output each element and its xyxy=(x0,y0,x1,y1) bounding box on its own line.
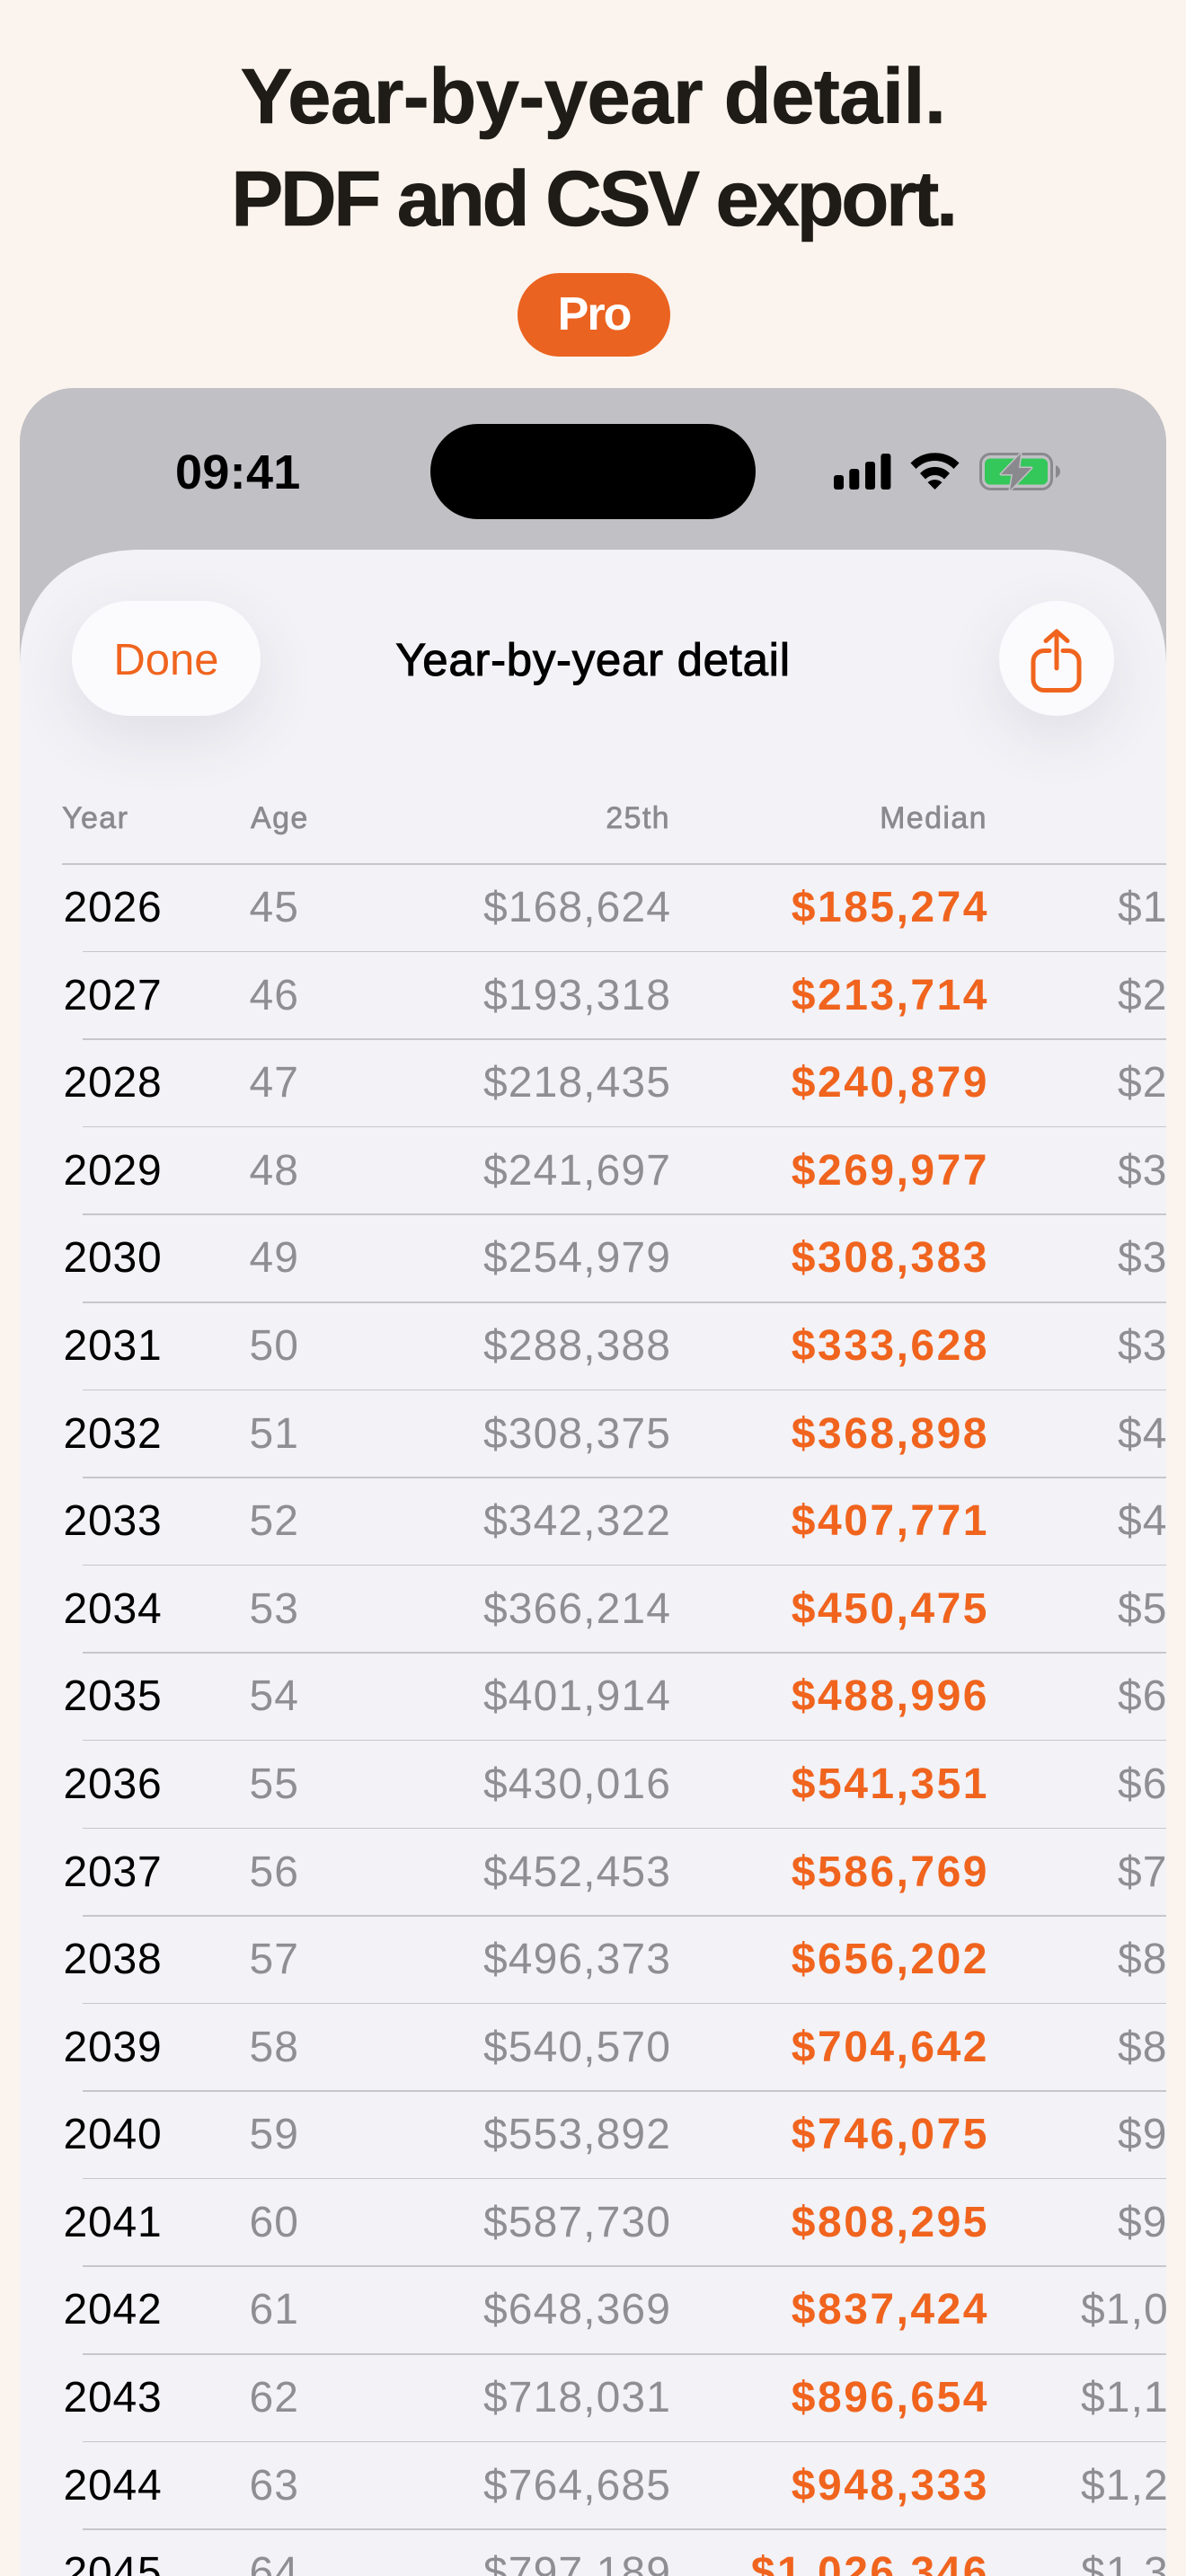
table column headers: Age xyxy=(251,801,309,835)
row 2036 xyxy=(65,1740,1166,1805)
row 2026: 2026 xyxy=(63,884,162,931)
row 2037: 56 xyxy=(250,1848,299,1895)
row 2031: $333,628 xyxy=(792,1322,989,1370)
row 2039: 58 xyxy=(250,2024,299,2071)
row 2028: $218,435 xyxy=(483,1059,671,1107)
row 2043: $1,1 xyxy=(1081,2374,1166,2422)
row 2042 xyxy=(65,2265,1166,2330)
row 2042: 61 xyxy=(250,2286,299,2333)
row 2033: $4 xyxy=(1118,1497,1166,1545)
row 2027: $2 xyxy=(1118,972,1166,1019)
row 2034: 53 xyxy=(250,1585,299,1633)
row 2032 xyxy=(65,1389,1166,1455)
row 2044: $948,333 xyxy=(792,2461,989,2510)
table column headers xyxy=(62,805,985,835)
row 2035: $401,914 xyxy=(483,1672,671,1720)
row 2030: 2030 xyxy=(63,1234,162,1282)
row 2039: 2039 xyxy=(63,2024,162,2071)
row 2037 xyxy=(65,1828,1166,1893)
row 2031: $3 xyxy=(1118,1322,1166,1370)
icon: charging battery xyxy=(979,453,1060,490)
row 2026: $1 xyxy=(1118,884,1166,931)
status bar time: 09:41 xyxy=(175,446,301,499)
row 2034: $366,214 xyxy=(483,1585,671,1633)
table column headers: Year xyxy=(62,801,128,835)
row 2038: $8 xyxy=(1118,1936,1166,1983)
icon: share xyxy=(1031,629,1082,693)
row 2035: 2035 xyxy=(63,1672,162,1720)
row 2043 xyxy=(65,2353,1166,2418)
row 2033: 2033 xyxy=(63,1497,162,1545)
row 2030: $3 xyxy=(1118,1234,1166,1282)
row 2032: 2032 xyxy=(63,1410,162,1458)
row 2044: 63 xyxy=(250,2461,299,2510)
row 2028: $240,879 xyxy=(792,1059,989,1107)
row 2042: $837,424 xyxy=(792,2286,989,2333)
row 2031: 50 xyxy=(250,1322,299,1370)
row 2044: 2044 xyxy=(63,2461,162,2510)
row 2039: $540,570 xyxy=(483,2024,671,2071)
row 2030: 49 xyxy=(250,1234,299,1282)
row 2041: $9 xyxy=(1118,2199,1166,2246)
panel: year-by-year sheet xyxy=(20,550,1166,2576)
row 2045 xyxy=(66,2528,1166,2576)
row 2039 xyxy=(65,2003,1166,2068)
row 2031: $288,388 xyxy=(483,1322,671,1370)
row 2027 xyxy=(65,951,1166,1017)
row 2029: $241,697 xyxy=(483,1147,671,1195)
row 2040: 59 xyxy=(250,2111,299,2158)
row 2029: $3 xyxy=(1118,1147,1166,1195)
row 2033: 52 xyxy=(250,1497,299,1545)
icon: cellular signal xyxy=(834,454,891,490)
row 2034: $450,475 xyxy=(792,1585,989,1633)
row 2031: 2031 xyxy=(63,1322,162,1370)
row 2044 xyxy=(65,2441,1166,2506)
row 2043: 62 xyxy=(250,2374,299,2422)
row 2032: $4 xyxy=(1118,1410,1166,1458)
row 2040: $553,892 xyxy=(483,2111,671,2158)
row 2037: $586,769 xyxy=(792,1848,989,1895)
row 2042: $1,0 xyxy=(1081,2286,1166,2333)
dynamic island xyxy=(430,424,756,519)
row 2036: $430,016 xyxy=(483,1760,671,1808)
row 2037: 2037 xyxy=(63,1848,162,1895)
row 2031 xyxy=(65,1301,1166,1367)
table column headers: 25th xyxy=(606,801,670,835)
row 2027: 2027 xyxy=(63,972,162,1019)
row 2033: $407,771 xyxy=(792,1497,989,1545)
table column headers: Median xyxy=(880,801,987,835)
row 2032: 51 xyxy=(250,1410,299,1458)
row 2043: $896,654 xyxy=(792,2374,989,2422)
row 2038: $656,202 xyxy=(792,1936,989,1983)
row 2026 xyxy=(65,889,1164,929)
row 2039: $704,642 xyxy=(792,2024,989,2071)
button: share xyxy=(999,601,1114,716)
row 2040: 2040 xyxy=(63,2111,162,2158)
table rows xyxy=(65,889,1166,2576)
row 2026: $185,274 xyxy=(792,884,989,931)
row 2037: $452,453 xyxy=(483,1848,671,1895)
badge: Pro xyxy=(518,273,670,357)
row 2027: $193,318 xyxy=(483,972,671,1019)
row 2028 xyxy=(65,1038,1166,1103)
row 2038 xyxy=(65,1915,1166,1980)
row 2041: 2041 xyxy=(63,2199,162,2246)
row 2027: 46 xyxy=(250,972,299,1019)
row 2043: $718,031 xyxy=(483,2374,671,2422)
row 2026: $168,624 xyxy=(483,884,671,931)
row 2033: $342,322 xyxy=(483,1497,671,1545)
row 2040: $746,075 xyxy=(792,2111,989,2158)
row 2038: 57 xyxy=(250,1936,299,1983)
sheet heading: Year-by-year detail xyxy=(395,634,791,685)
row 2030 xyxy=(65,1213,1166,1279)
row 2043: 2043 xyxy=(63,2374,162,2422)
row 2038: $496,373 xyxy=(483,1936,671,1983)
row 2041 xyxy=(65,2178,1166,2244)
button: Done: Done xyxy=(113,636,219,684)
row 2026: 45 xyxy=(250,884,299,931)
row 2030: $254,979 xyxy=(483,1234,671,1282)
row 2041: 60 xyxy=(250,2199,299,2246)
row 2042: 2042 xyxy=(63,2286,162,2333)
row 2029: 48 xyxy=(250,1147,299,1195)
row 2036: $541,351 xyxy=(792,1760,989,1808)
button: Done xyxy=(72,601,261,716)
row 2036: 2036 xyxy=(63,1760,162,1808)
row 2029: 2029 xyxy=(63,1147,162,1195)
title: PDF and CSV export. xyxy=(231,155,955,243)
row 2027: $213,714 xyxy=(792,972,989,1019)
row 2028: $2 xyxy=(1118,1059,1166,1107)
badge: Pro: Pro xyxy=(558,288,630,340)
row 2034: 2034 xyxy=(63,1585,162,1633)
row 2036: 55 xyxy=(250,1760,299,1808)
row 2034: $5 xyxy=(1118,1585,1166,1633)
row 2036: $6 xyxy=(1118,1760,1166,1808)
row 2032: $308,375 xyxy=(483,1410,671,1458)
row 2029: $269,977 xyxy=(792,1147,989,1195)
row 2042: $648,369 xyxy=(483,2286,671,2333)
row 2033 xyxy=(65,1477,1166,1541)
row 2029 xyxy=(65,1126,1166,1191)
row 2028: 47 xyxy=(250,1059,299,1107)
row 2041: $808,295 xyxy=(792,2199,989,2246)
row 2035 xyxy=(65,1652,1166,1717)
row 2032: $368,898 xyxy=(792,1410,989,1458)
row 2035: 54 xyxy=(250,1672,299,1720)
row 2041: $587,730 xyxy=(483,2199,671,2246)
row 2035: $488,996 xyxy=(792,1672,989,1720)
icon: wifi xyxy=(911,453,960,490)
row 2040 xyxy=(65,2090,1166,2156)
row 2028: 2028 xyxy=(63,1059,162,1107)
row 2040: $9 xyxy=(1118,2111,1166,2158)
row 2030: $308,383 xyxy=(792,1234,989,1282)
row 2044: $764,685 xyxy=(483,2461,671,2510)
title: Year-by-year detail. xyxy=(241,53,945,140)
row 2035: $6 xyxy=(1118,1672,1166,1720)
header divider xyxy=(62,863,1166,864)
title xyxy=(231,53,955,243)
row 2044: $1,2 xyxy=(1081,2461,1166,2510)
row 2039: $8 xyxy=(1118,2024,1166,2071)
row 2037: $7 xyxy=(1118,1848,1166,1895)
row 2034 xyxy=(65,1565,1166,1629)
row 2038: 2038 xyxy=(63,1936,162,1983)
